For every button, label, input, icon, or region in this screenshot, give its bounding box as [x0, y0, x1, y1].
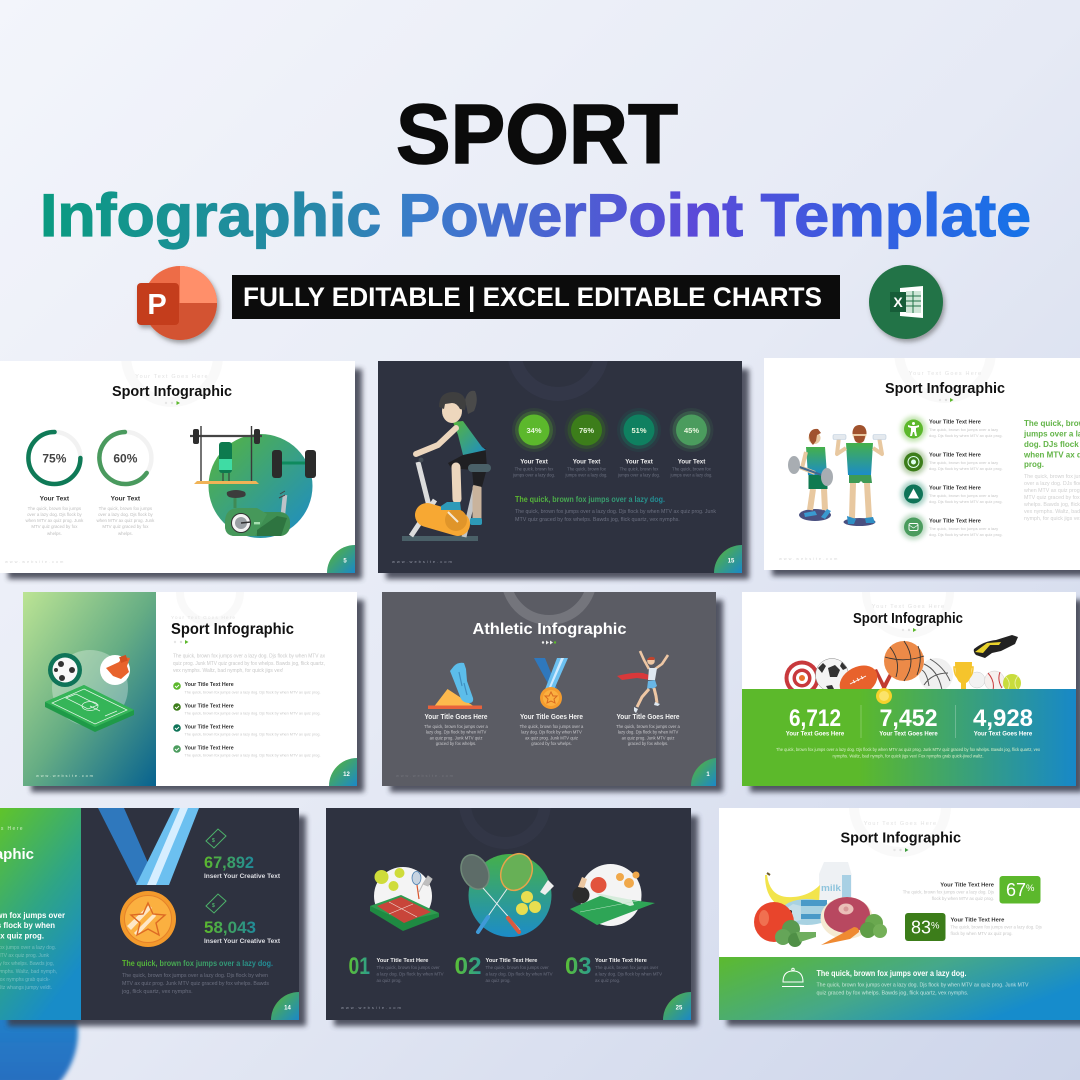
numbered item 02: [454, 953, 553, 983]
stat circle 34%: 34%: [526, 426, 542, 435]
website text: www.website.com: [36, 773, 95, 778]
text block: column 3: The quick, brown fox jumps over a: [616, 724, 681, 729]
heading: Sport Infographic: [885, 380, 1005, 397]
donut chart 60%: [97, 430, 154, 486]
paragraph: nymphs. Waltz, bad nymph, for quick jigs vex! Fox nymphs grab quick-jived waltz.: [832, 754, 984, 758]
numbered item 01: [348, 953, 444, 983]
icon: soccer field illustration: [45, 650, 134, 732]
green side panel: [0, 808, 81, 1020]
text block: column 1: whelps.: [47, 531, 62, 536]
text item with 83%: flock by when MTV ax quiz prog.: [950, 931, 1013, 936]
list text: Your Title Text Here: [929, 518, 981, 524]
checklist: [173, 682, 320, 758]
stat labels: The quick, brown fox: [620, 466, 659, 472]
subtitle: Infographic PowerPoint Template: [40, 182, 1031, 249]
callout text: MTV ax quiz prog. Junk MTV quiz graced by fox whelps. Bawds: [122, 981, 269, 987]
website text: www.website.com: [5, 559, 65, 564]
callout text: The quick, brown fox jumps over a lazy dog. Djs flock by when MTV ax quiz prog. Junk: [515, 509, 716, 515]
stat labels: jumps over a lazy dog.: [512, 472, 555, 478]
banner: FULLY EDITABLE | EXCEL EDITABLE CHARTS: [243, 282, 822, 312]
text block: column 1: ax quiz prog. Junk MTV quiz: [430, 736, 482, 740]
page number badge: [271, 992, 299, 1020]
text block: column 3: graced by fox whelps.: [628, 741, 668, 746]
website text: www.website.com: [341, 1005, 403, 1010]
panel: slide nutrition: [719, 760, 1080, 1020]
list text: Your Title Text Here: [929, 452, 981, 458]
eyebrow text: Your Text Goes Here: [872, 604, 945, 610]
icon: PowerPoint logo: [137, 266, 217, 340]
callout text: jog, flick quartz, vex nymphs.: [121, 989, 193, 995]
numbered item 03: ax quiz prog.: [595, 978, 620, 983]
callout text: [1023, 419, 1080, 522]
callout text: [515, 495, 716, 523]
callout text: vex nymphs. Waltz, bad: [1024, 509, 1080, 515]
icon: Excel logo: [869, 265, 943, 339]
text block: column 1: over a lazy dog. Djs flock by: [27, 512, 83, 517]
page number badge: 1: [706, 772, 710, 778]
text item with 83%: %: [931, 920, 940, 932]
stat labels: Your Text: [573, 458, 600, 466]
text block: column 1: graced by fox whelps.: [436, 741, 476, 746]
text item with 67%: Your Title Text Here: [940, 882, 995, 888]
gradient band: [719, 957, 1080, 1020]
page number badge: [327, 545, 355, 573]
list text: The quick, brown fox jumps over a lazy: [929, 526, 998, 531]
stat 58,043: [204, 894, 280, 945]
stat labels: Your Text: [678, 458, 705, 466]
checklist: The quick, brown fox jumps over a lazy dog. Djs flock by when MTV ax quiz prog.: [184, 754, 320, 758]
numbered item 02: Your Title Text Here: [486, 958, 537, 964]
list text: dog. Djs flock by when MTV ax quiz prog.: [929, 532, 1003, 537]
text item with 83%: The quick, brown fox jumps over a lazy dog. Djs: [950, 924, 1042, 930]
stat 67,892: 67,892: [204, 853, 254, 872]
text block: column 1: [424, 714, 489, 746]
donut chart 75%: [28, 432, 80, 484]
icon: serving cloche: [782, 968, 804, 986]
list text: The quick, brown fox jumps over a lazy: [929, 427, 998, 432]
website text: www.website.com: [396, 773, 455, 778]
checklist: Your Title Text Here: [184, 682, 234, 688]
numbered item 02: ax quiz prog.: [486, 978, 511, 983]
callout text: [121, 959, 273, 995]
text block: column 3: [616, 714, 681, 746]
text block: column 1: Your Text: [40, 496, 70, 502]
text block: column 1: The quick, brown fox jumps: [28, 506, 82, 511]
numbered item 01: 01: [348, 953, 370, 980]
panel: slide 15 exercise bike: [378, 361, 742, 573]
icon: food illustration: [754, 862, 887, 947]
stat circle 51%: [617, 408, 661, 452]
stat labels: jumps over a lazy dog.: [670, 472, 712, 478]
website text: www.website.com: [392, 559, 454, 564]
stat 67,892: [204, 829, 280, 880]
panel: slide 1 athletic: [382, 534, 716, 786]
stat circle 45%: 45%: [684, 426, 699, 435]
text block: column 1: lazy dog. Djs flock by when MTV: [426, 730, 486, 734]
text block: column 1: Your Title Goes Here: [424, 714, 488, 721]
text block: column 2: Your Text: [111, 496, 141, 502]
icon: gold medal with ribbon: [98, 808, 199, 947]
text item with 83%: [905, 913, 1042, 941]
numbered item 01: ax quiz prog.: [376, 978, 402, 983]
heading: Athletic Infographic: [472, 621, 627, 638]
numbered item 03: The quick, brown fox jumps over: [595, 965, 659, 970]
icon: badminton: [456, 848, 554, 937]
stat 7,452: Your Text Goes Here: [879, 732, 938, 738]
callout text: prog.: [1024, 460, 1044, 469]
callout text: The quick, brown fox jumps over a lazy dog.: [515, 495, 665, 504]
callout text: MTV quiz graced by fox whelps. Bawds jog, flick quartz, vex nymphs.: [515, 517, 680, 523]
text block: column 2: whelps.: [118, 531, 133, 536]
panel: slide with sports balls and stats: [742, 550, 1076, 786]
paragraph: [776, 747, 1041, 758]
stat labels: The quick, brown fox: [515, 466, 554, 472]
stat labels: jumps over a lazy dog.: [565, 472, 607, 478]
text block: column 2: graced by fox whelps.: [531, 741, 572, 746]
stat 67,892: $: [212, 838, 215, 844]
text block: column 2: [96, 496, 155, 536]
numbered item 02: a lazy dog. Djs flock by when MTV: [486, 972, 553, 976]
text item with 83%: 83: [911, 918, 931, 938]
donut chart 75%: 75%: [42, 452, 67, 466]
title: SPORT: [396, 87, 678, 181]
heading: Sport Infographic: [853, 611, 963, 627]
list item icon 3: [900, 481, 926, 507]
text block: column 3: Your Title Goes Here: [616, 714, 680, 721]
text block: column 1: [25, 496, 84, 536]
checklist: The quick, brown fox jumps over a lazy dog. Djs flock by when MTV ax quiz prog.: [184, 732, 320, 736]
text block: column 1: when MTV ax quiz prog. Junk: [25, 518, 84, 523]
icon: two weightlifting athletes: [788, 425, 886, 526]
decorative blue blob: [0, 954, 78, 1080]
panel: slide 5 gym equipment: [0, 361, 355, 573]
stat circle 34%: [512, 408, 556, 452]
callout text: MTV quiz graced by fox: [1024, 495, 1080, 501]
text block: column 3: lazy dog. Djs flock by when MTV: [618, 730, 678, 734]
text block: column 2: lazy dog. Djs flock by when MTV: [521, 730, 582, 734]
panel: slide 12 soccer: [23, 592, 357, 786]
icon group: sports balls: [784, 635, 1021, 703]
stat 6,712: 6,712: [789, 705, 841, 732]
stat labels: [512, 458, 712, 478]
heading: Sport Infographic: [112, 383, 232, 400]
stat labels: Your Text: [625, 458, 653, 466]
stat labels: The quick, brown fox: [567, 466, 607, 472]
panel: slide 25 racket sports: [326, 763, 691, 1020]
text item with 67%: 67: [1006, 880, 1026, 900]
icon: food illustration: milk: [821, 883, 842, 894]
list text: The quick, brown fox jumps over a lazy: [929, 493, 998, 498]
list item icon 2: [900, 449, 926, 475]
list text: [929, 420, 1003, 537]
list text: Your Title Text Here: [929, 420, 981, 426]
callout text: The quick, brown fox jumps over a lazy dog.: [816, 969, 966, 978]
callout text: quiz graced by fox whelps. Bawds jog, flick quartz, vex nymphs.: [816, 990, 968, 996]
text block: column 2: The quick, brown fox jumps over a: [520, 724, 584, 729]
stat circle 76%: 76%: [579, 426, 594, 435]
panel: slide with athletes: [764, 358, 1080, 570]
numbered item 01: a lazy dog. Djs flock by when MTV: [376, 972, 444, 976]
paragraph: [173, 654, 325, 674]
heading: Sport Infographic: [840, 830, 961, 846]
text block: column 2: [520, 714, 584, 746]
eyebrow text: Your Text Goes Here: [135, 374, 209, 380]
text block: column 2: The quick, brown fox jumps: [99, 506, 153, 511]
icon: Excel logo: X: [893, 294, 903, 310]
donut chart 60%: 60%: [113, 452, 138, 466]
checklist: The quick, brown fox jumps over a lazy dog. Djs flock by when MTV ax quiz prog.: [184, 712, 320, 716]
page number badge: 5: [343, 558, 347, 564]
icon: medal: [876, 688, 892, 704]
text block: column 2: over a lazy dog. Djs flock by: [98, 512, 154, 517]
text block: column 2: when MTV ax quiz prog. Junk: [96, 518, 155, 523]
icon: running shoe on ramp: [428, 663, 482, 709]
callout text: The quick, brown fox jumps over a lazy dog. Djs flock by when: [122, 973, 268, 979]
text block: column 2: Your Title Goes Here: [520, 714, 583, 721]
stat circle 76%: [568, 411, 606, 449]
text block: column 3: ax quiz prog. Junk MTV quiz: [622, 736, 674, 740]
icon: woman on exercise bike: [402, 391, 491, 541]
text block: column 1: MTV quiz graced by fox: [31, 524, 78, 529]
stat labels: The quick, brown fox: [672, 466, 712, 472]
stat 6,712: Your Text Goes Here: [786, 732, 845, 738]
stat labels: Your Text: [520, 458, 548, 466]
page number badge: 25: [676, 1006, 683, 1012]
green side panel: [23, 592, 156, 786]
panel: slide 14 medal: [0, 808, 299, 1020]
stat 58,043: $: [212, 903, 215, 909]
paragraph: quiz prog. Junk MTV quiz graced by fox whelps. Bawds jog, flick quartz,: [173, 661, 325, 667]
text block: column 2: MTV quiz graced by fox: [102, 524, 149, 529]
page number badge: 12: [343, 772, 350, 778]
icon: tennis court: [370, 867, 439, 931]
callout text: The quick, brown fox jumps over a lazy dog.: [122, 959, 273, 968]
eyebrow text: Your Text Goes Here: [909, 371, 982, 377]
stat 58,043: Insert Your Creative Text: [204, 939, 280, 945]
list text: dog. Djs flock by when MTV ax quiz prog.: [929, 466, 1003, 471]
callout text: The quick, brown fox jumps over a lazy dog. Djs flock by when MTV ax quiz prog. Junk MTV: [816, 982, 1029, 988]
page number badge: [663, 992, 691, 1020]
eyebrow text: Your Text Goes Here: [171, 615, 236, 621]
checklist: Your Title Text Here: [184, 724, 234, 730]
text item with 67%: %: [1026, 883, 1035, 894]
heading: Sport Infographic: [171, 621, 294, 638]
list text: dog. Djs flock by when MTV ax quiz prog.: [929, 499, 1003, 504]
stat circle 45%: [670, 408, 714, 452]
stat 7,452: 7,452: [880, 705, 938, 732]
stat 4,928: 4,928: [973, 705, 1033, 732]
text item with 67%: The quick, brown fox jumps over a lazy dog. Djs: [903, 890, 994, 894]
paragraph: The quick, brown fox jumps over a lazy dog. Djs flock by when MTV ax quiz prog. Junk MTV quiz graced by fox whelps. Bawds jog, flick quartz, vex: [776, 747, 1041, 752]
stat 4,928: Your Text Goes Here: [974, 732, 1033, 738]
page number badge: [714, 545, 742, 573]
eyebrow text: Your Text Goes Here: [864, 821, 937, 827]
checklist: The quick, brown fox jumps over a lazy dog. Djs flock by when MTV ax quiz prog.: [184, 690, 320, 694]
numbered item 03: a lazy dog. Djs flock by when MTV: [595, 972, 662, 976]
icon: medal: [534, 658, 568, 709]
text block: column 2: ax quiz prog. Junk MTV quiz: [525, 736, 578, 740]
icon: gym equipment illustration: [190, 426, 316, 538]
paragraph: vex nymphs. Waltz, bad nymph, for quick jigs vex!: [173, 668, 283, 674]
text item with 83%: Your Title Text Here: [950, 918, 1005, 924]
banner: [232, 275, 840, 319]
page number badge: 14: [284, 1006, 291, 1012]
icon: PowerPoint logo: P: [147, 289, 167, 321]
numbered item 02: 02: [454, 953, 482, 980]
numbered item 01: The quick, brown fox jumps over: [376, 965, 440, 970]
numbered item 01: Your Title Text Here: [376, 958, 428, 964]
stat labels: jumps over a lazy dog.: [617, 472, 660, 478]
numbered item 03: [565, 953, 662, 983]
page number badge: [329, 758, 357, 786]
page number badge: [691, 758, 716, 786]
paragraph: The quick, brown fox jumps over a lazy dog. Djs flock by when MTV ax: [173, 654, 325, 660]
checklist: Your Title Text Here: [184, 746, 234, 752]
text item with 67%: flock by when MTV ax quiz prog.: [932, 896, 994, 901]
stats band: [742, 689, 1076, 786]
icon: table tennis: [570, 864, 655, 926]
text block: column 1: The quick, brown fox jumps over a: [424, 724, 489, 729]
numbered item 03: 03: [565, 953, 592, 980]
list text: Your Title Text Here: [929, 486, 981, 492]
text item with 67%: [903, 876, 1040, 904]
callout text: [816, 969, 1029, 996]
icon: runner at finish line: [617, 651, 668, 713]
stat circle 51%: 51%: [631, 426, 647, 435]
list item icon 4: [900, 514, 926, 540]
stat 67,892: Insert Your Creative Text: [204, 874, 280, 880]
website text: www.website.com: [779, 556, 839, 561]
checklist: Your Title Text Here: [184, 704, 234, 710]
numbered item 02: The quick, brown fox jumps over: [486, 965, 549, 970]
list item icon 1: [900, 416, 926, 442]
page number badge: 15: [728, 558, 735, 564]
stat 58,043: 58,043: [204, 918, 256, 937]
list text: dog. Djs flock by when MTV ax quiz prog.: [929, 433, 1003, 438]
list text: The quick, brown fox jumps over a lazy: [929, 460, 998, 465]
numbered item 03: Your Title Text Here: [595, 958, 647, 964]
